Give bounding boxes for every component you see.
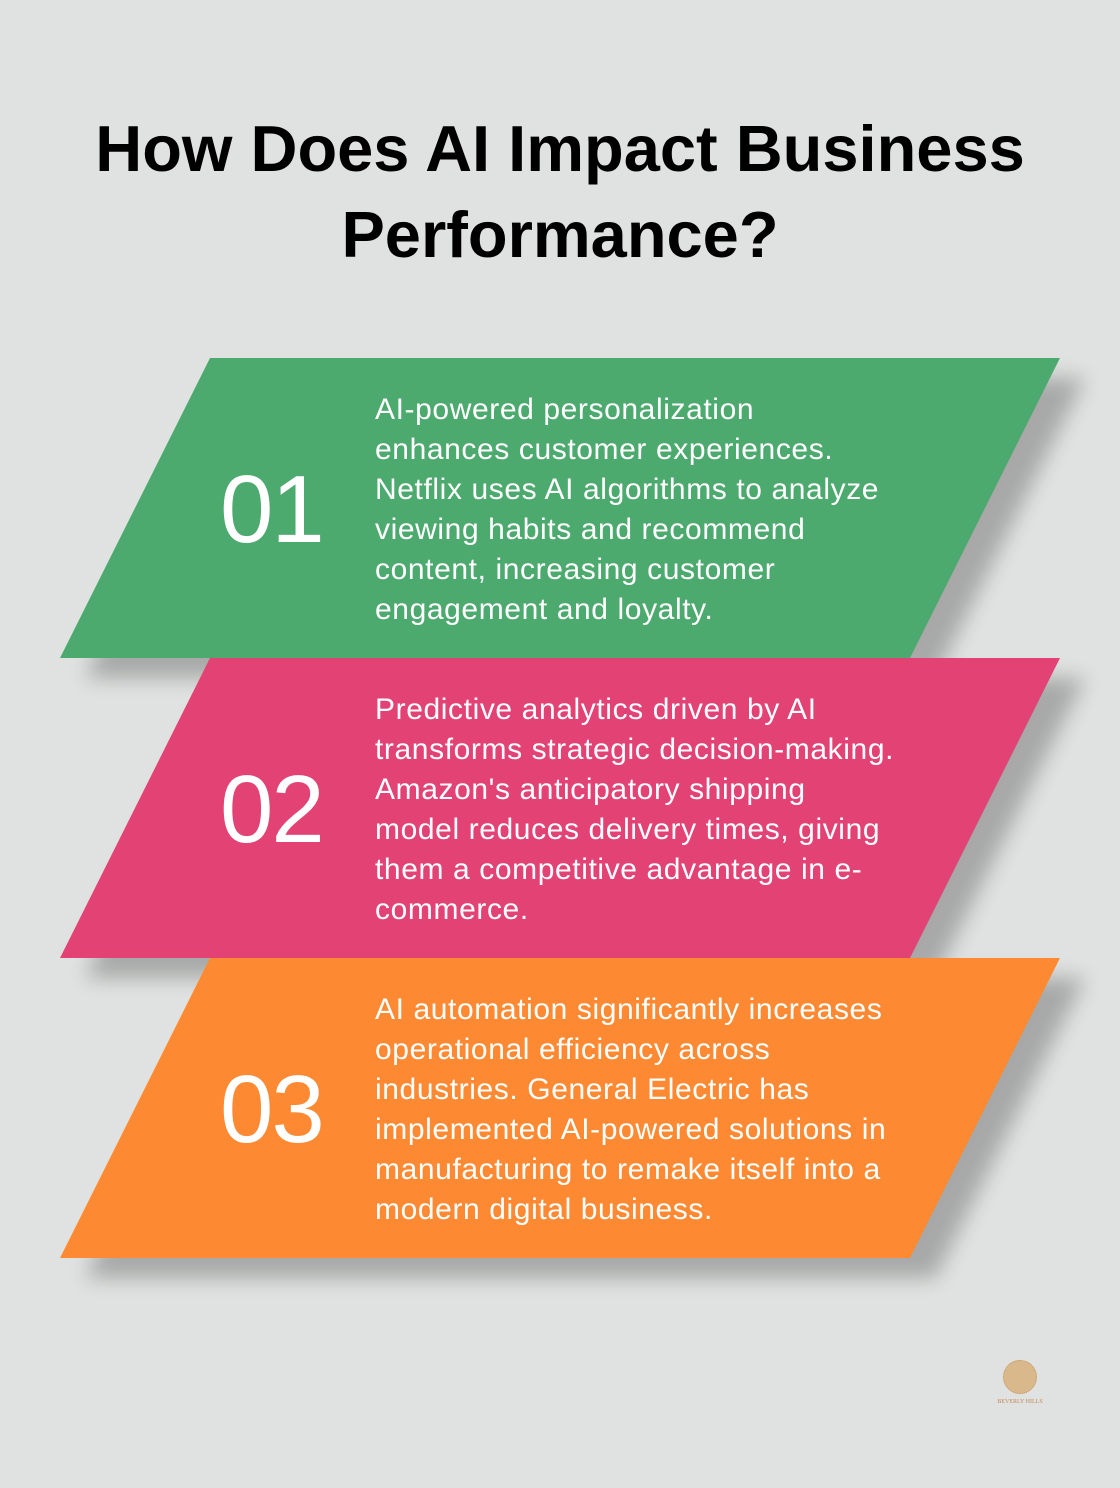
number 02: 02 — [220, 756, 323, 863]
logo: BEVERLY HILLS — [997, 1399, 1043, 1405]
text 2: Predictive analytics driven by AI — [375, 693, 817, 726]
text 3: modern digital business. — [375, 1193, 713, 1226]
text 3: manufacturing to remake itself into a — [375, 1153, 881, 1186]
text 2 — [375, 693, 894, 926]
title — [95, 112, 1025, 271]
number 03: 03 — [220, 1056, 323, 1163]
text 2: transforms strategic decision-making. — [375, 733, 894, 766]
text 2: Amazon's anticipatory shipping — [375, 773, 806, 806]
text 1 — [375, 393, 879, 626]
text 1: enhances customer experiences. — [375, 433, 833, 466]
text 1: Netflix uses AI algorithms to analyze — [375, 473, 879, 506]
number 01: 01 — [220, 456, 323, 563]
title: How Does AI Impact Business — [95, 112, 1025, 185]
text 1: content, increasing customer — [375, 553, 775, 586]
text 3: industries. General Electric has — [375, 1073, 809, 1106]
text 1: viewing habits and recommend — [375, 513, 805, 546]
logo — [997, 1360, 1043, 1405]
text 2: model reduces delivery times, giving — [375, 813, 880, 846]
text 1: engagement and loyalty. — [375, 593, 713, 626]
text 2: commerce. — [375, 893, 529, 926]
text 3 — [375, 993, 886, 1226]
text 3: operational efficiency across — [375, 1033, 770, 1066]
text 2: them a competitive advantage in e- — [375, 853, 862, 886]
text 3: implemented AI-powered solutions in — [375, 1113, 886, 1146]
text 3: AI automation significantly increases — [375, 993, 882, 1026]
text 1: AI-powered personalization — [375, 393, 754, 426]
title: Performance? — [341, 198, 779, 271]
